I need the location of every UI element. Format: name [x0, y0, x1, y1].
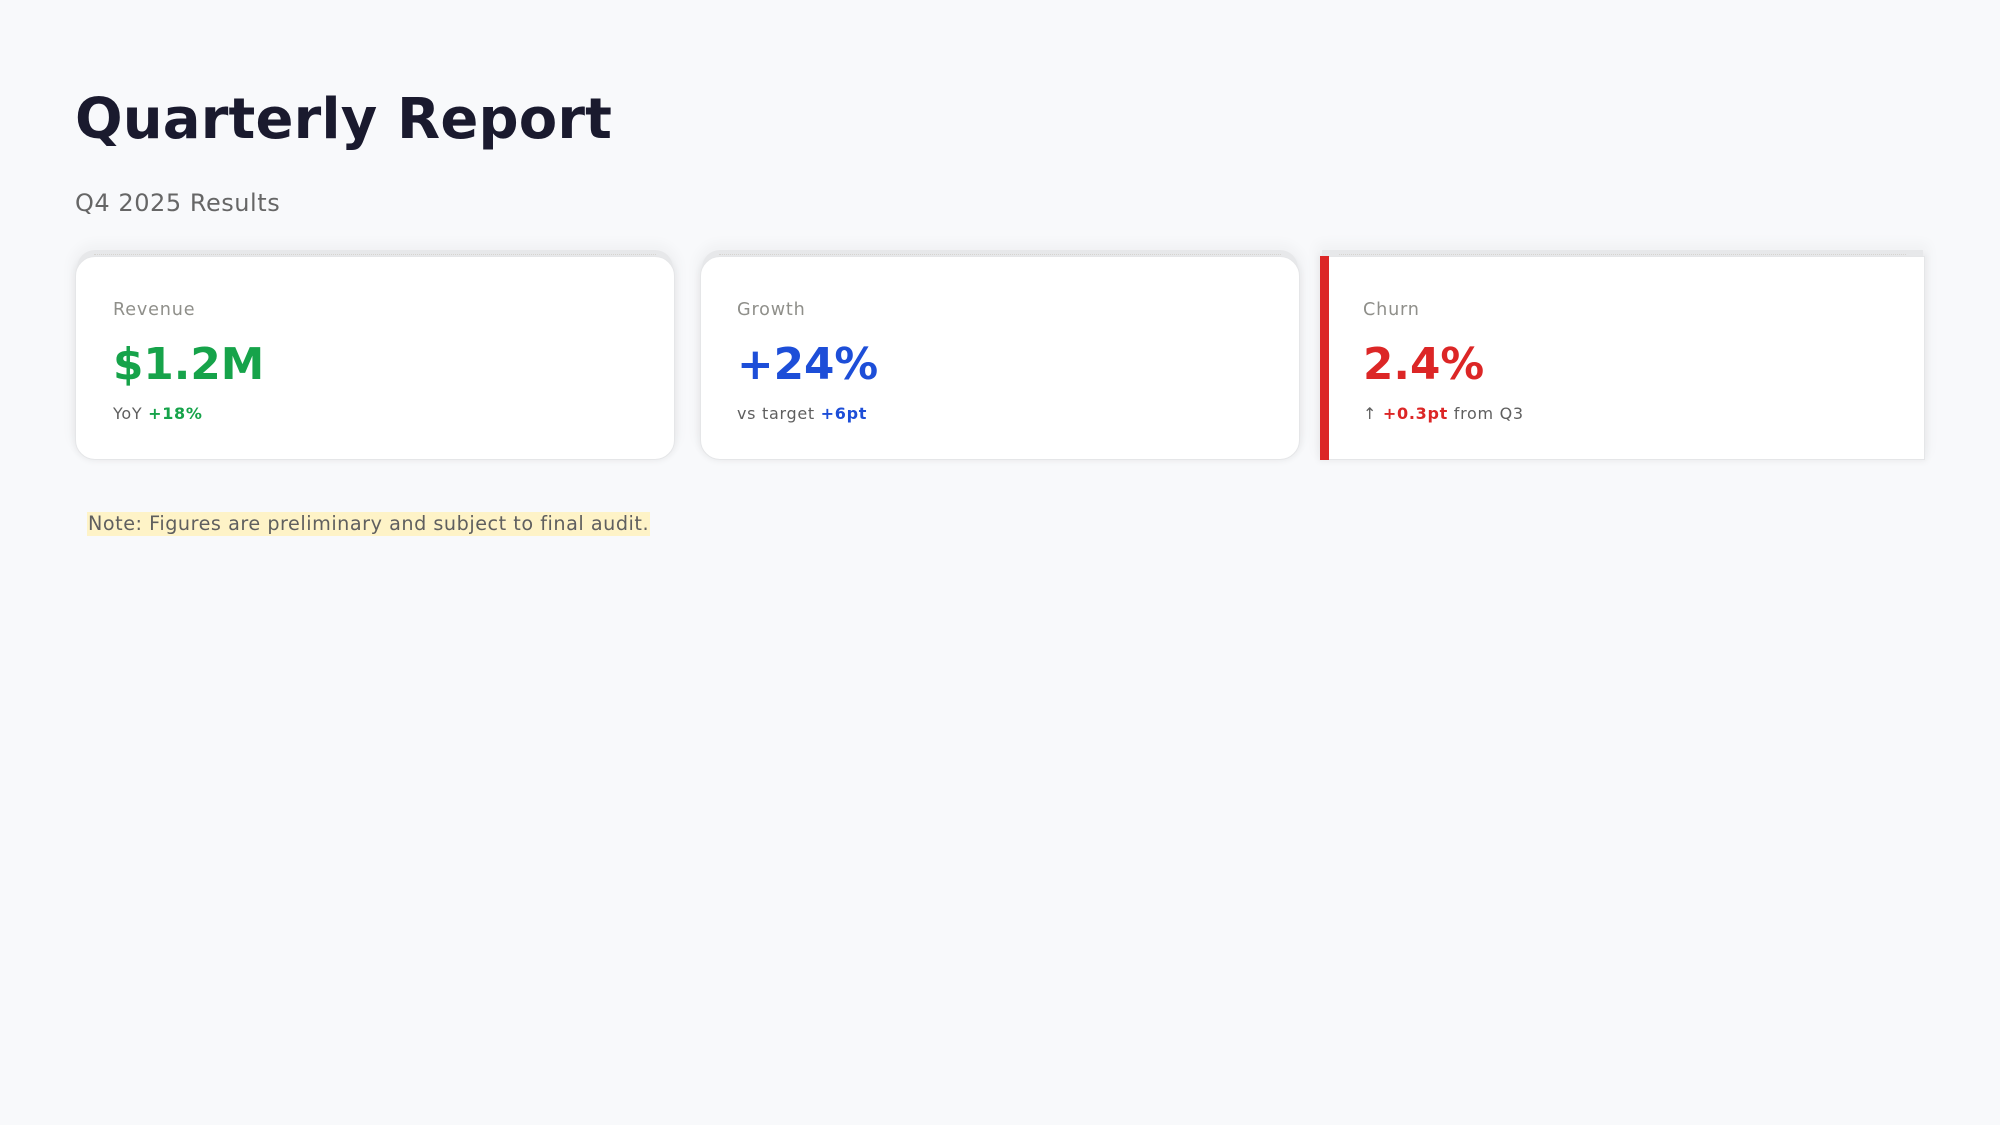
- churn accent bar: [1320, 256, 1329, 460]
- churn label: Churn: [1363, 300, 1420, 320]
- churn change: ↑ +0.3pt from Q3: [1363, 404, 1524, 423]
- title: Quarterly Report: [75, 87, 612, 152]
- panel: churn card: [1320, 256, 1925, 460]
- panel: growth card: [700, 256, 1300, 460]
- panel: revenue card: [75, 256, 675, 460]
- growth label: Growth: [737, 300, 806, 320]
- revenue label: Revenue: [113, 300, 195, 320]
- subtitle: Q4 2025 Results: [75, 189, 280, 217]
- revenue change: YoY +18%: [113, 404, 203, 423]
- growth value: +24%: [737, 339, 878, 390]
- growth versus target: vs target +6pt: [737, 404, 867, 423]
- revenue value: $1.2M: [113, 339, 264, 390]
- note highlight: Note: Figures are preliminary and subject to final audit.: [88, 512, 649, 535]
- churn value: 2.4%: [1363, 339, 1484, 390]
